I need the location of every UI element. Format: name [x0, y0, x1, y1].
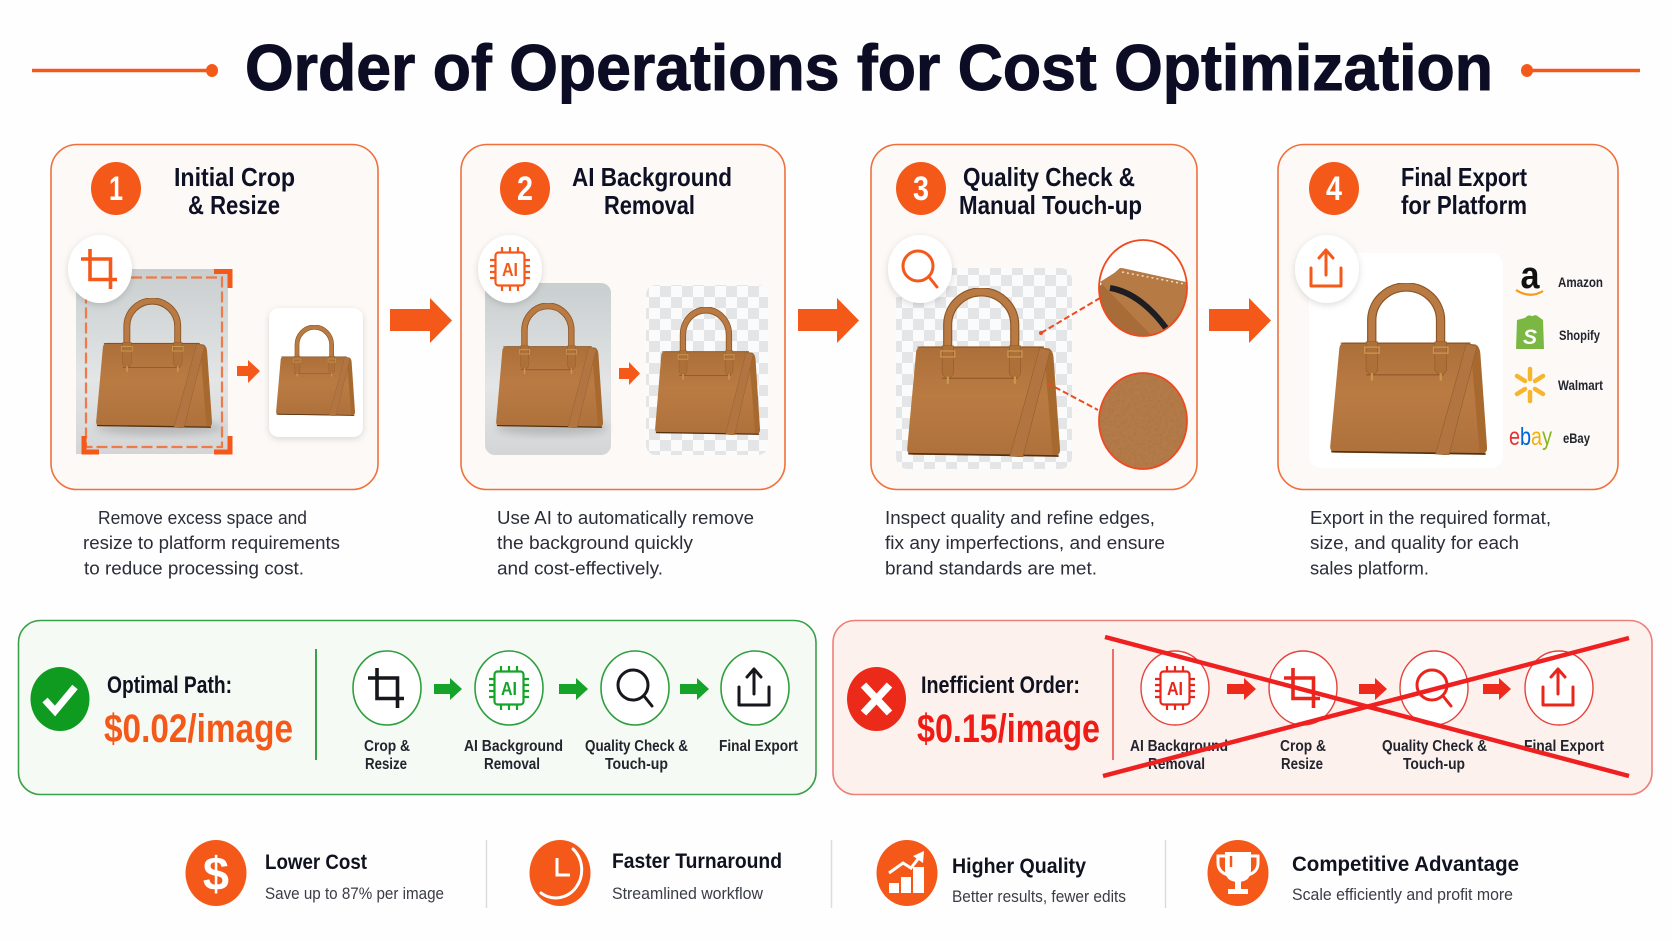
icon: magnifier: [888, 235, 952, 303]
benefit: higher quality: Higher Quality: [952, 854, 1086, 878]
step 3 number: 3: [913, 170, 929, 208]
icon: upload: [1295, 235, 1359, 303]
icon: AI chip: AI: [502, 260, 518, 280]
benefit: faster turnaround: [530, 840, 782, 906]
step 1 description: Remove excess space and: [98, 507, 307, 528]
step 3 heading: [959, 162, 1142, 220]
step 4 number: [1309, 162, 1359, 215]
arrow: [1483, 678, 1511, 700]
optimal path label: Optimal Path:: [107, 672, 232, 699]
benefit: higher quality: [876, 840, 1126, 906]
benefit: faster turnaround: Streamlined workflow: [612, 884, 764, 903]
benefit: lower cost: Save up to 87% per image: [265, 884, 444, 903]
benefit: lower cost: [186, 840, 444, 906]
step 2 number: 2: [517, 170, 533, 208]
step 4 description: sales platform.: [1310, 558, 1429, 578]
inefficient step: AI background removal: AI Background: [1130, 738, 1228, 755]
panel: step 2: [461, 144, 785, 490]
inefficient step: quality check: Touch-up: [1403, 756, 1465, 773]
panel: step 4: [1278, 144, 1618, 490]
inefficient price: $0.15/image: [917, 707, 1100, 751]
optimal step: crop: Crop &: [364, 738, 410, 755]
inefficient step: crop: [1269, 651, 1337, 773]
detail circle: stitching: [1098, 239, 1188, 337]
inefficient order label: Inefficient Order:: [921, 672, 1080, 699]
inefficient step: quality check: Quality Check &: [1382, 738, 1487, 755]
optimal step: AI background removal: [464, 651, 563, 773]
optimal step: quality check: [585, 651, 688, 773]
final product card: [1309, 253, 1503, 468]
optimal step: final export: Final Export: [719, 738, 798, 755]
step 1 number: [91, 162, 141, 215]
step 2 description: Use AI to automatically remove: [497, 507, 754, 528]
inefficient step: AI background removal: Removal: [1148, 756, 1205, 773]
arrow: [434, 678, 462, 700]
benefit: higher quality: Better results, fewer edits: [952, 887, 1126, 906]
logo: Shopify: [1516, 315, 1600, 349]
step 2 description: the background quickly: [497, 532, 694, 553]
title rule left: [32, 64, 218, 77]
step 3 description: Inspect quality and refine edges,: [885, 507, 1155, 528]
logo: Shopify: S: [1523, 326, 1537, 349]
optimal step: final export: [719, 651, 798, 755]
step 4 heading: Final Export: [1401, 162, 1527, 192]
optimal step: quality check: Quality Check &: [585, 738, 688, 755]
arrow: step 1 to 2: [390, 298, 452, 343]
step 1 description: [83, 507, 340, 578]
step 2 heading: Removal: [604, 190, 695, 220]
step 1 heading: & Resize: [188, 190, 280, 220]
step 3 number: [896, 162, 946, 215]
panel: step 3: [871, 144, 1200, 490]
step 3 description: fix any imperfections, and ensure: [885, 532, 1165, 553]
benefit: faster turnaround: Faster Turnaround: [612, 849, 782, 873]
step 2 description: [497, 507, 754, 578]
optimal step: AI background removal: Removal: [484, 756, 540, 773]
logo: Amazon: [1516, 255, 1603, 297]
logo: Shopify: Shopify: [1559, 328, 1600, 343]
title: Order of Operations for Cost Optimization: [245, 31, 1493, 104]
step 3 heading: Quality Check &: [963, 162, 1135, 192]
optimal price: $0.02/image: [104, 707, 293, 751]
inefficient step: final export: [1524, 651, 1604, 755]
step 4 description: [1310, 507, 1551, 578]
photo with grey background: [485, 283, 611, 455]
inefficient step: crop: Crop &: [1280, 738, 1326, 755]
step 2 heading: [572, 162, 732, 220]
arrow: step 2 to 3: [798, 298, 859, 343]
arrow: [680, 678, 709, 700]
logo: eBay: eBay: [1563, 431, 1590, 446]
benefit: competitive advantage: [1208, 840, 1519, 906]
step 4 description: size, and quality for each: [1310, 532, 1519, 553]
logo: Amazon: a: [1520, 255, 1540, 297]
optimal step: AI background removal: AI: [501, 679, 517, 699]
optimal step: crop: [353, 651, 421, 773]
arrow: step 3 to 4: [1209, 298, 1271, 343]
bag on transparent background: [646, 285, 768, 455]
panel: optimal path: [18, 620, 816, 794]
step 2 heading: AI Background: [572, 162, 732, 192]
step 3 heading: Manual Touch-up: [959, 190, 1142, 220]
step 1 heading: [174, 162, 295, 220]
bag on checkerboard: [896, 268, 1072, 469]
title rule right: [1521, 64, 1640, 77]
panel: step 1: [51, 144, 378, 490]
inefficient step: crop: Resize: [1281, 756, 1323, 773]
panel: inefficient order: [833, 620, 1652, 794]
optimal step: quality check: Touch-up: [605, 756, 668, 773]
detail circle: leather texture: [1099, 373, 1187, 469]
step 1 number: 1: [109, 170, 123, 208]
logo: eBay: ebay: [1509, 423, 1552, 451]
inefficient step: quality check: [1382, 651, 1487, 773]
inefficient step: AI background removal: [1130, 651, 1228, 773]
step 4 number: 4: [1326, 170, 1342, 208]
icon: crop: [68, 235, 132, 303]
cropped result: [269, 308, 363, 437]
step 3 description: brand standards are met.: [885, 558, 1097, 578]
step 1 description: resize to platform requirements: [83, 532, 340, 553]
step 3 description: [885, 507, 1165, 578]
original photo with crop frame: [76, 269, 230, 454]
step 2 number: [500, 162, 550, 215]
step 4 heading: [1401, 162, 1527, 220]
step 1 heading: Initial Crop: [174, 162, 295, 192]
logo: eBay: [1509, 423, 1590, 451]
icon: check: [30, 667, 90, 731]
step 1 description: to reduce processing cost.: [84, 558, 304, 578]
icon: AI chip: [478, 235, 542, 303]
small arrow: [237, 360, 260, 383]
optimal step: crop: Resize: [365, 756, 407, 773]
step 2 description: and cost-effectively.: [497, 558, 663, 578]
step 4 description: Export in the required format,: [1310, 507, 1551, 528]
zoom callout lines: [1039, 298, 1100, 410]
icon: cross: [847, 667, 906, 731]
benefit: lower cost: Lower Cost: [265, 850, 367, 874]
logo: Amazon: Amazon: [1558, 275, 1603, 290]
benefit: competitive advantage: Scale efficiently and profit more: [1292, 885, 1513, 904]
logo: Walmart: [1517, 369, 1603, 401]
inefficient step: AI background removal: AI: [1167, 679, 1183, 699]
optimal step: AI background removal: AI Background: [464, 738, 563, 755]
red cross-out: [1103, 637, 1629, 776]
step 4 heading: for Platform: [1401, 190, 1527, 220]
arrow: [1227, 678, 1256, 700]
inefficient step: final export: Final Export: [1524, 738, 1604, 755]
logo: Walmart: Walmart: [1558, 378, 1603, 393]
arrow: [1359, 678, 1387, 700]
benefit: competitive advantage: Competitive Advantage: [1292, 852, 1519, 876]
arrow: [559, 678, 588, 700]
small arrow: [619, 362, 640, 385]
benefit: lower cost: $: [203, 847, 229, 900]
